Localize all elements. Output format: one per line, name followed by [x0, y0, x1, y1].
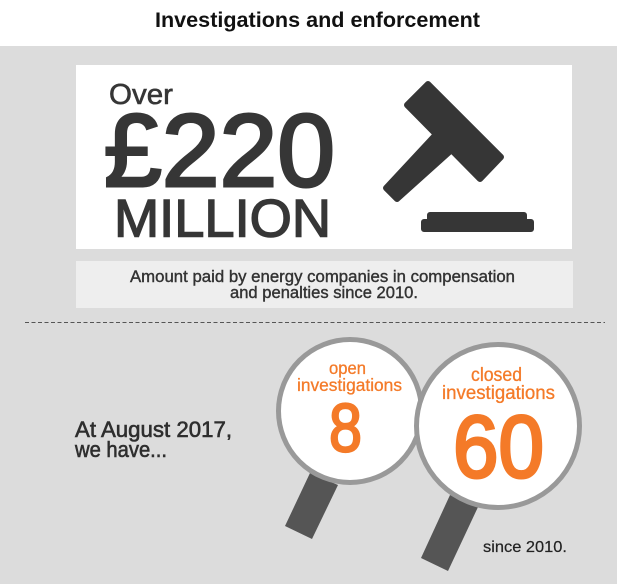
text: amount: £220 [104, 93, 335, 208]
text: at august 2017: we have... [74, 437, 167, 462]
magnifier: closed investigations: investigations [442, 383, 555, 404]
closed number: 60 [453, 397, 544, 496]
icon: closed handle [421, 495, 478, 571]
panel: amount description: and penalties since 2010. [230, 284, 418, 302]
open label: open [329, 358, 366, 378]
open lens [278, 340, 422, 482]
magnifier: open investigations: investigations [297, 375, 402, 395]
title: Investigations and enforcement [155, 9, 480, 32]
panel: amount description [76, 261, 573, 308]
magnifier: closed investigations [416, 344, 580, 571]
open number: 8 [329, 390, 362, 466]
closed label: closed [471, 365, 522, 386]
title [0, 0, 617, 46]
icon: open handle [285, 473, 338, 539]
icon: gavel [386, 84, 531, 229]
text: at august 2017 [74, 417, 232, 462]
panel: amount description: Amount paid by energy companies in compensation [130, 268, 515, 286]
closed lens [416, 344, 580, 508]
text: at august 2017: At August 2017, [75, 417, 232, 442]
text: over: Over [109, 79, 173, 111]
text: million: MILLION [114, 190, 331, 248]
text: since 2010: since 2010. [483, 539, 567, 556]
panel: headline amount [76, 65, 572, 249]
magnifier: open investigations [278, 340, 422, 539]
